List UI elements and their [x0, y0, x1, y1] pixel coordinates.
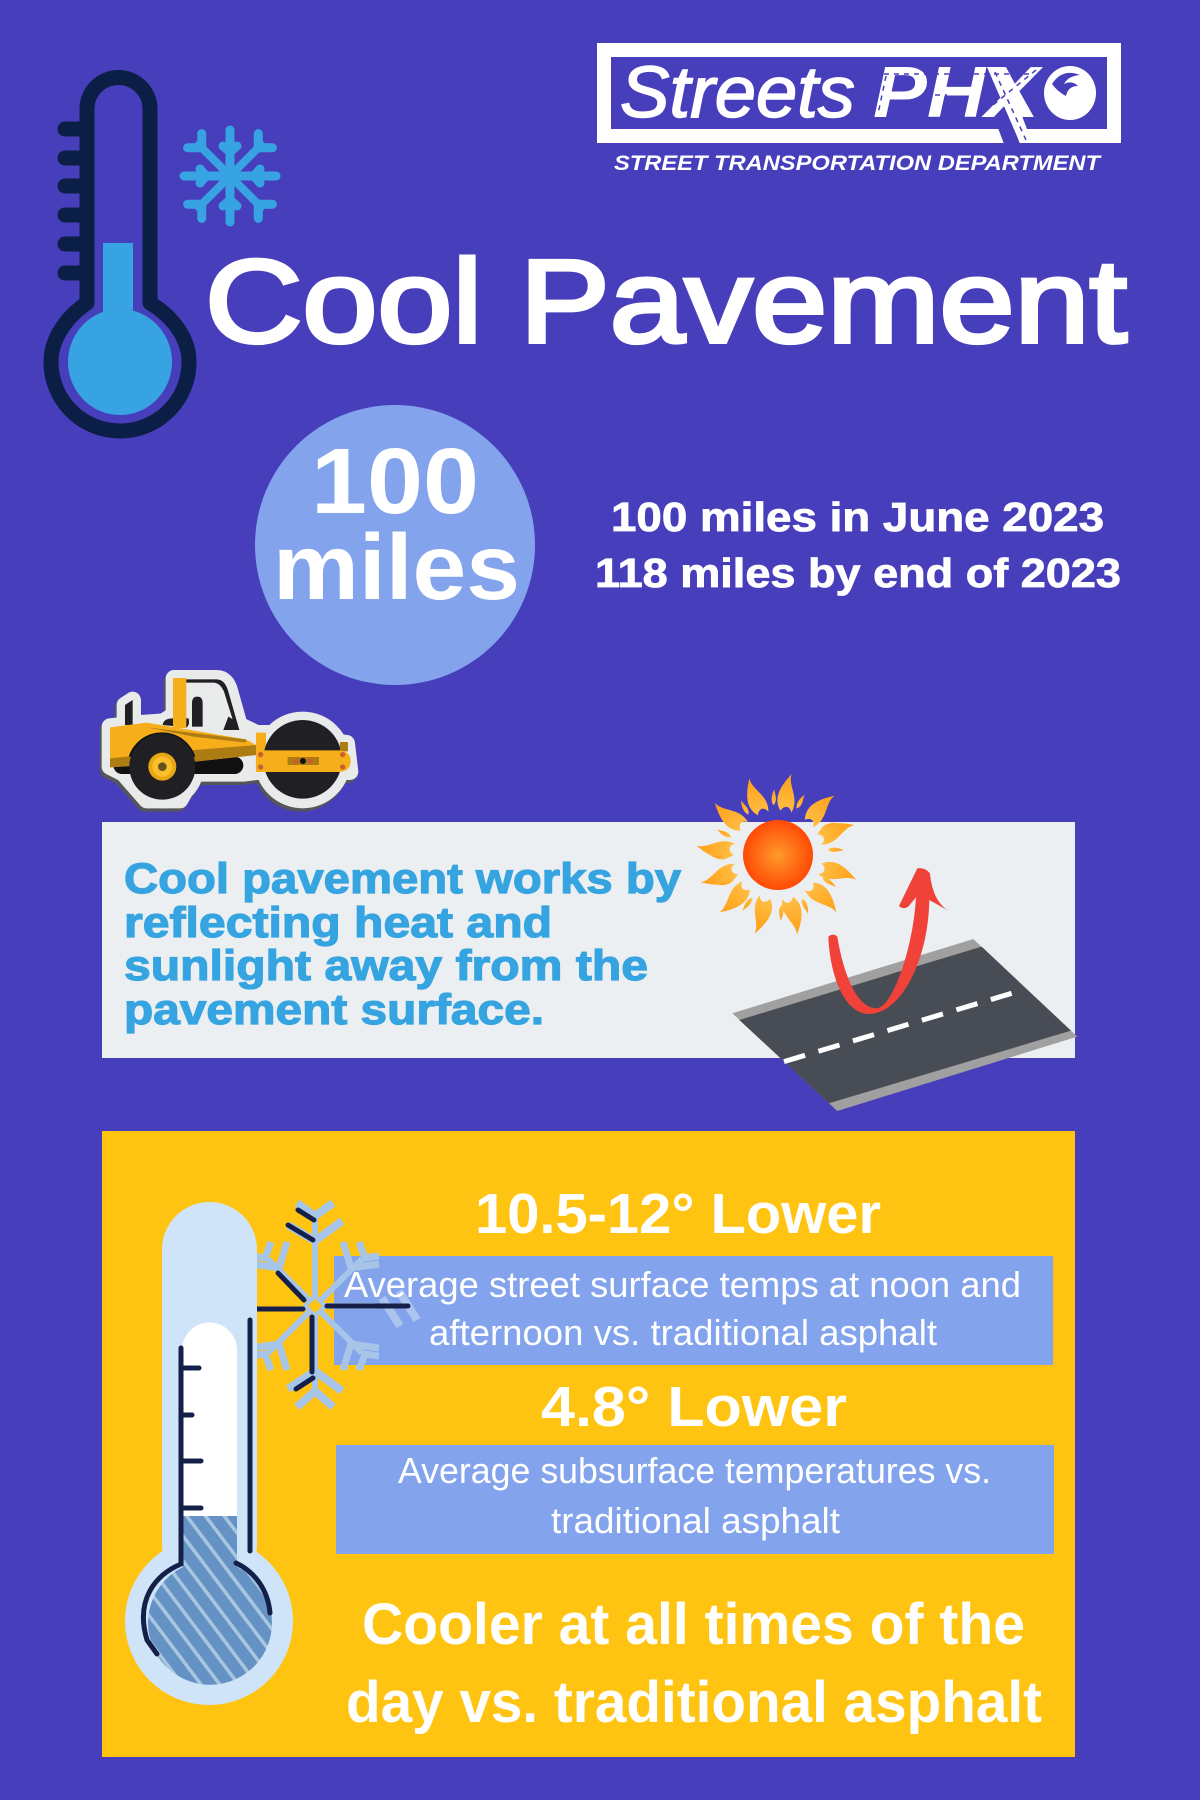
circle: 100 miles: 100 [311, 429, 479, 533]
text block: mileage [595, 494, 1121, 596]
logo: Streets PHX: PHX [873, 53, 1043, 133]
text: street surface temps [344, 1264, 1021, 1353]
circle: 100 miles: miles [273, 515, 520, 619]
text: cooler statement [346, 1592, 1042, 1735]
text: street surface temps: Average street surface temps at noon and [344, 1264, 1021, 1305]
icon: sun [695, 772, 859, 937]
text block: mileage: 118 miles by end of 2023 [595, 550, 1121, 596]
icon: thermometer top [51, 78, 189, 431]
text block: explanation [124, 855, 681, 1034]
panel: temperature results [102, 1131, 1075, 1757]
icon: snowflake large [251, 1203, 417, 1407]
icon: road roller [108, 678, 351, 803]
box: subsurface temps [336, 1445, 1054, 1554]
text: cooler statement: Cooler at all times of the [362, 1592, 1025, 1657]
arrow: reflected heat [828, 868, 948, 1014]
title: Cool Pavement [205, 236, 1127, 368]
heading: 10.5-12 lower: 10.5-12° Lower [475, 1182, 881, 1246]
box: street surface temps background [334, 1256, 1053, 1365]
icon: snowflake small [184, 130, 276, 222]
text block: mileage: 100 miles in June 2023 [611, 494, 1104, 540]
box: subsurface temps: Average subsurface temperatures vs. [398, 1450, 991, 1491]
text block: explanation: Cool pavement works by [124, 855, 681, 903]
logo subtitle: STREET TRANSPORTATION DEPARTMENT [614, 152, 1102, 175]
circle: 100 miles [255, 405, 535, 685]
heading: 4.8 lower: 4.8° Lower [541, 1375, 847, 1439]
text block: explanation: pavement surface. [124, 986, 544, 1034]
icon: thermometer large [125, 1202, 293, 1705]
logo: Streets PHX [597, 43, 1121, 144]
text block: explanation: reflecting heat and [124, 899, 552, 947]
box: subsurface temps: traditional asphalt [551, 1500, 840, 1541]
panel: how cool pavement works [102, 772, 1077, 1111]
text: street surface temps: afternoon vs. traditional asphalt [429, 1312, 937, 1353]
text: cooler statement: day vs. traditional asphalt [346, 1670, 1042, 1735]
text block: explanation: sunlight away from the [124, 942, 648, 990]
logo: Streets PHX: Streets [620, 53, 855, 133]
icon: road [732, 939, 1077, 1111]
